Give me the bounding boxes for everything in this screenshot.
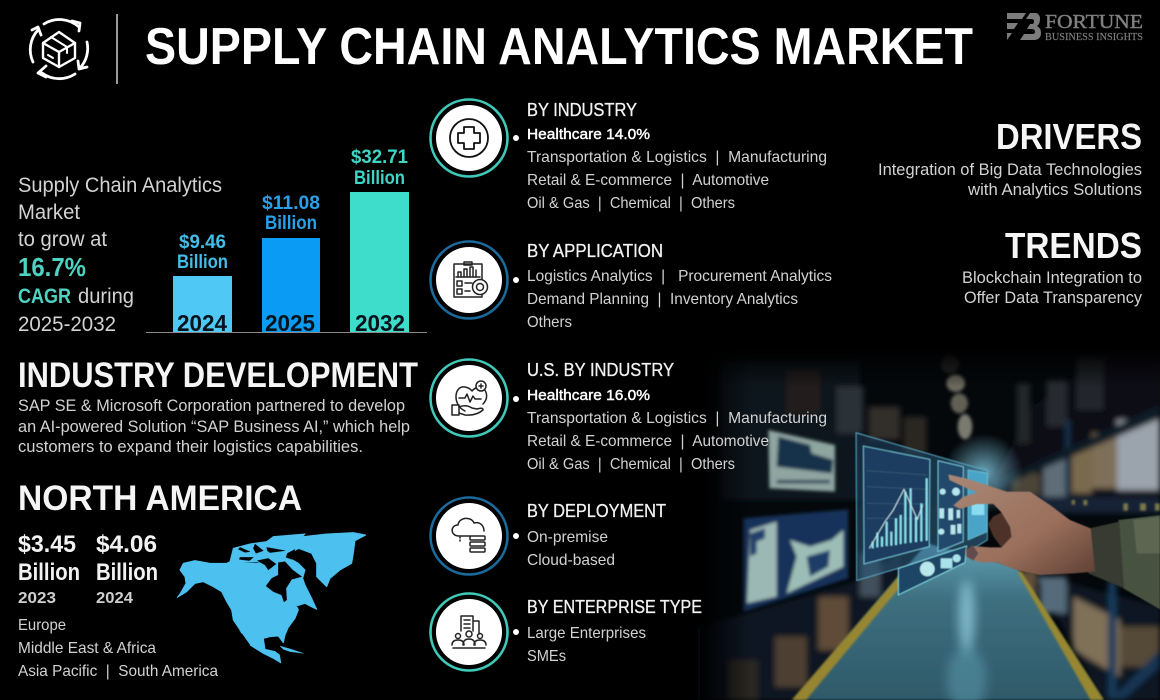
text: market growth summary: 2025-2032	[18, 313, 116, 336]
icon: enterprise building and people	[430, 594, 508, 670]
text: market growth summary	[18, 174, 222, 336]
segment: by industry: Transportation & Logistics | Manufacturing	[527, 149, 827, 166]
header divider	[116, 14, 118, 84]
drivers	[878, 116, 1142, 199]
bar chart: market size: $9.46	[179, 232, 226, 253]
text: industry development: customers to expand their logistics capabilities.	[18, 437, 363, 456]
segment: U.S. by industry: Retail & E-commerce | Automotive	[527, 433, 769, 450]
text: industry development: SAP SE & Microsoft Corporation partnered to develop	[18, 396, 405, 415]
text: other regions: Europe	[18, 617, 66, 634]
stats: north america values: Billion	[18, 559, 80, 586]
segment: by deployment: BY DEPLOYMENT	[527, 501, 666, 521]
text: market growth summary: Market	[18, 201, 80, 224]
logo: Fortune Business Insights: BUSINESS INSIGHTS	[1045, 32, 1143, 43]
bar chart: market size: 2032	[355, 310, 405, 336]
bar chart: market size: $32.71	[351, 147, 408, 168]
text: other regions: Middle East & Africa	[18, 640, 156, 657]
trends	[962, 225, 1142, 307]
central holographic panel	[856, 433, 987, 595]
bar chart: market size: Billion	[177, 252, 228, 273]
bullet	[513, 135, 519, 141]
segment: U.S. by industry: Healthcare 16.0%	[527, 387, 650, 404]
bar chart: market size	[146, 147, 427, 336]
photo: hand touching holographic dashboard in warehouse	[700, 335, 1160, 700]
text: market growth summary: during	[78, 285, 134, 308]
bar chart: market size: $11.08	[262, 193, 320, 214]
bullet	[513, 277, 519, 283]
segment: by application: Others	[527, 314, 572, 331]
bar chart: market size: Billion	[265, 213, 317, 234]
icon: cloud server	[430, 498, 508, 574]
hand and sleeve	[948, 474, 1160, 609]
bullet	[513, 629, 519, 635]
stats: north america values: $3.45	[18, 531, 76, 558]
icon: heart care hand	[430, 360, 508, 436]
heading: north america: NORTH AMERICA	[18, 479, 302, 518]
text: market growth summary: to grow at	[18, 228, 107, 251]
title: SUPPLY CHAIN ANALYTICS MARKET	[145, 18, 973, 76]
bullet	[513, 533, 519, 539]
stats: north america values	[18, 531, 158, 607]
text: industry development	[18, 396, 410, 456]
bullet	[513, 396, 519, 402]
segment: by deployment	[527, 501, 666, 569]
drivers: Integration of Big Data Technologies	[878, 160, 1142, 179]
segment: by enterprise type: SMEs	[527, 648, 566, 665]
icon: healthcare cross	[430, 100, 508, 176]
stats: north america values: 2023	[18, 590, 56, 607]
text: market growth summary: Supply Chain Analytics	[18, 174, 222, 197]
stats: north america values: 2024	[96, 590, 133, 607]
blurred left screens	[743, 430, 848, 612]
segment: U.S. by industry: U.S. BY INDUSTRY	[527, 360, 674, 380]
segment: by application: Logistics Analytics | Procurement Analytics	[527, 268, 832, 285]
map: north america	[177, 533, 366, 663]
segment: by enterprise type: BY ENTERPRISE TYPE	[527, 597, 702, 617]
text: other regions	[18, 617, 218, 680]
segment: by application	[527, 241, 832, 331]
drivers: DRIVERS	[996, 116, 1142, 157]
segment: by deployment: Cloud-based	[527, 552, 615, 569]
drivers: with Analytics Solutions	[967, 180, 1142, 199]
text: industry development: an AI-powered Solution “SAP Business AI,” which help	[18, 417, 410, 436]
bar chart: market size: 2024	[177, 310, 227, 336]
stats: north america values: Billion	[96, 559, 158, 586]
segment: by application: Demand Planning | Inventory Analytics	[527, 291, 798, 308]
segment: U.S. by industry: Oil & Gas | Chemical | Others	[527, 456, 735, 473]
segment: U.S. by industry: Transportation & Logistics | Manufacturing	[527, 410, 827, 427]
text: other regions: Asia Pacific | South America	[18, 663, 218, 680]
segment: by industry	[527, 100, 827, 212]
segment: by industry: BY INDUSTRY	[527, 100, 637, 120]
text: market growth summary: CAGR	[18, 285, 71, 308]
trends: Offer Data Transparency	[964, 288, 1142, 307]
logo: Fortune Business Insights: FORTUNE	[1045, 11, 1143, 33]
segment: by application: BY APPLICATION	[527, 241, 663, 261]
stats: north america values: $4.06	[96, 531, 157, 558]
segment: by enterprise type	[527, 597, 702, 665]
heading: industry development: INDUSTRY DEVELOPMENT	[18, 356, 418, 395]
segment: by deployment: On-premise	[527, 529, 608, 546]
trends: Blockchain Integration to	[962, 268, 1142, 287]
segment: by industry: Healthcare 14.0%	[527, 126, 650, 143]
header icon: box with circular arrows	[30, 19, 88, 79]
segment: by industry: Oil & Gas | Chemical | Others	[527, 195, 735, 212]
bar chart: market size: Billion	[354, 168, 405, 189]
segment: by industry: Retail & E-commerce | Automotive	[527, 172, 769, 189]
logo: Fortune Business Insights	[1007, 11, 1143, 43]
trends: TRENDS	[1005, 225, 1142, 266]
segment: by enterprise type: Large Enterprises	[527, 625, 646, 642]
segment: U.S. by industry	[527, 360, 827, 473]
icon: application analytics clipboard	[430, 242, 508, 318]
text: market growth summary: 16.7%	[18, 252, 86, 282]
bar chart: market size: 2025	[265, 310, 315, 336]
